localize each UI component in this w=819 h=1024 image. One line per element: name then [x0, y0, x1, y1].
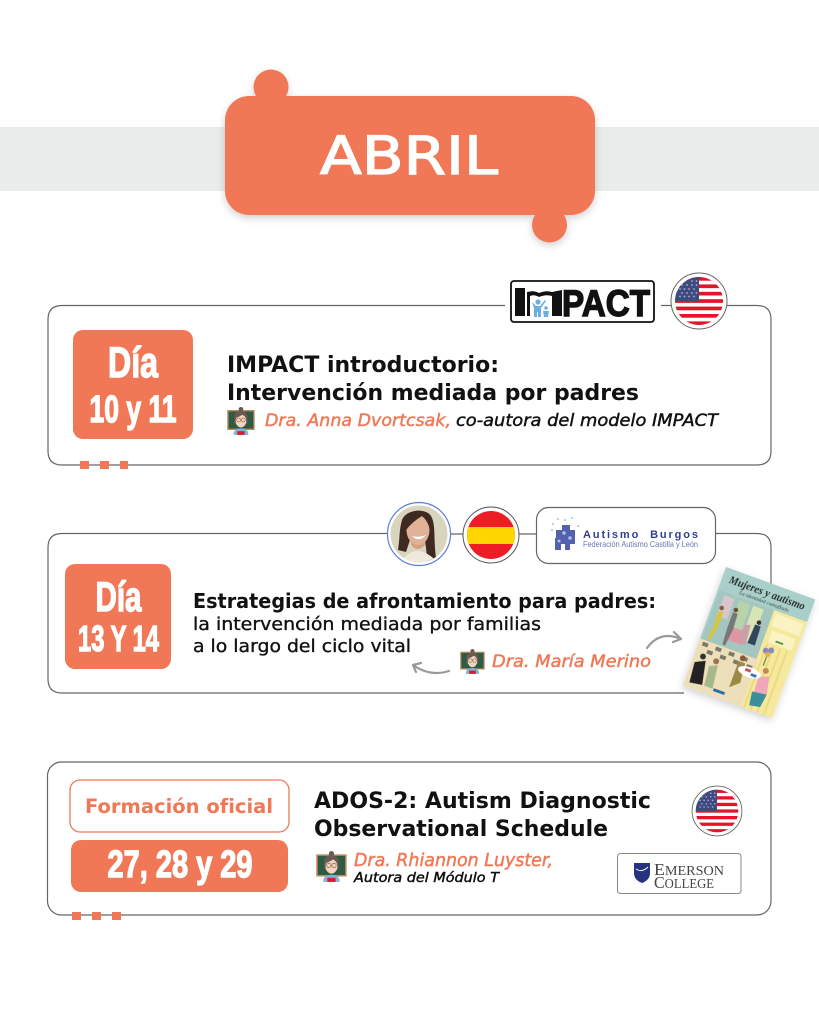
card outline 3: [48, 762, 771, 915]
icon: teacher 3: [317, 851, 346, 882]
speaker 3: Autora del Módulo T: [353, 870, 501, 886]
label: Formación oficial: Formación oficial: [85, 795, 273, 818]
speaker 1: Dra. Anna Dvortcsak,: [265, 411, 451, 431]
speaker 3: [353, 851, 553, 886]
date box 1: Día: [108, 339, 159, 387]
background band: [0, 127, 819, 191]
icon: Spanish flag: [463, 507, 519, 563]
card outline 2: [48, 534, 771, 693]
heading 2: Estrategias de afrontamiento para padres:: [193, 589, 656, 613]
date box 1: 10 y 11: [90, 389, 176, 431]
label: Formación oficial: [70, 780, 289, 832]
heading 1: Intervención mediada por padres: [227, 380, 639, 406]
icon: teacher 1: [228, 407, 254, 435]
speaker 3: Dra. Rhiannon Luyster,: [354, 851, 553, 871]
date box 2: 13 Y 14: [78, 618, 159, 659]
panel: Estrategias de afrontamiento: [48, 502, 815, 718]
subheading 2: [193, 614, 541, 657]
arrow left: [413, 663, 449, 673]
subheading 2: la intervención mediada por familias: [193, 614, 541, 635]
logo: Autismo Burgos: Autismo Burgos: [583, 529, 698, 541]
logo: Emerson College: EMERSON: [654, 860, 724, 879]
date box 1: [73, 330, 193, 439]
arrow right: [647, 632, 681, 648]
logo: Emerson College: [618, 854, 741, 894]
date box 3: 27, 28 y 29: [108, 844, 252, 886]
icon: US flag 1: [671, 273, 727, 329]
book cover: Mujeres y autismo: [683, 567, 815, 718]
subheading 2: a lo largo del ciclo vital: [193, 636, 411, 657]
date box 2: Día: [96, 573, 142, 620]
logo: Autismo Burgos: [536, 508, 716, 564]
icon: teacher 2: [461, 649, 484, 674]
heading 3: [314, 788, 651, 842]
heading 1: IMPACT introductorio:: [227, 352, 499, 378]
date box 2: [65, 564, 171, 669]
photo: Dra. María Merino: [388, 502, 450, 566]
decorative squares 3: [72, 912, 121, 920]
panel: IMPACT introductorio: [48, 273, 771, 469]
logo: IMPACT: PACT: [562, 283, 650, 324]
speaker 2: Dra. María Merino: [492, 652, 651, 672]
speaker 1: co-autora del modelo IMPACT: [456, 411, 720, 431]
panel: ADOS-2: [48, 762, 771, 920]
icon: US flag 3: [692, 786, 742, 836]
date box 3: [71, 840, 288, 892]
speaker 1: [265, 411, 720, 431]
decorative squares 1: [80, 461, 128, 469]
header banner: ABRIL: [225, 70, 595, 242]
logo: Autismo Burgos: Federación Autismo Castilla y León: [583, 539, 698, 549]
heading 3: Observational Schedule: [314, 816, 608, 842]
book cover: Mujeres y autismo: La identidad camuflada: [737, 589, 790, 614]
logo: IMPACT: [511, 281, 654, 324]
book cover: Mujeres y autismo: Mujeres y autismo: [726, 572, 807, 613]
logo: Emerson College: COLLEGE: [654, 873, 714, 892]
card outline 1: [48, 306, 771, 465]
heading 1: [227, 352, 639, 406]
banner heading: ABRIL: [320, 126, 499, 187]
heading 3: ADOS-2: Autism Diagnostic: [314, 788, 651, 814]
